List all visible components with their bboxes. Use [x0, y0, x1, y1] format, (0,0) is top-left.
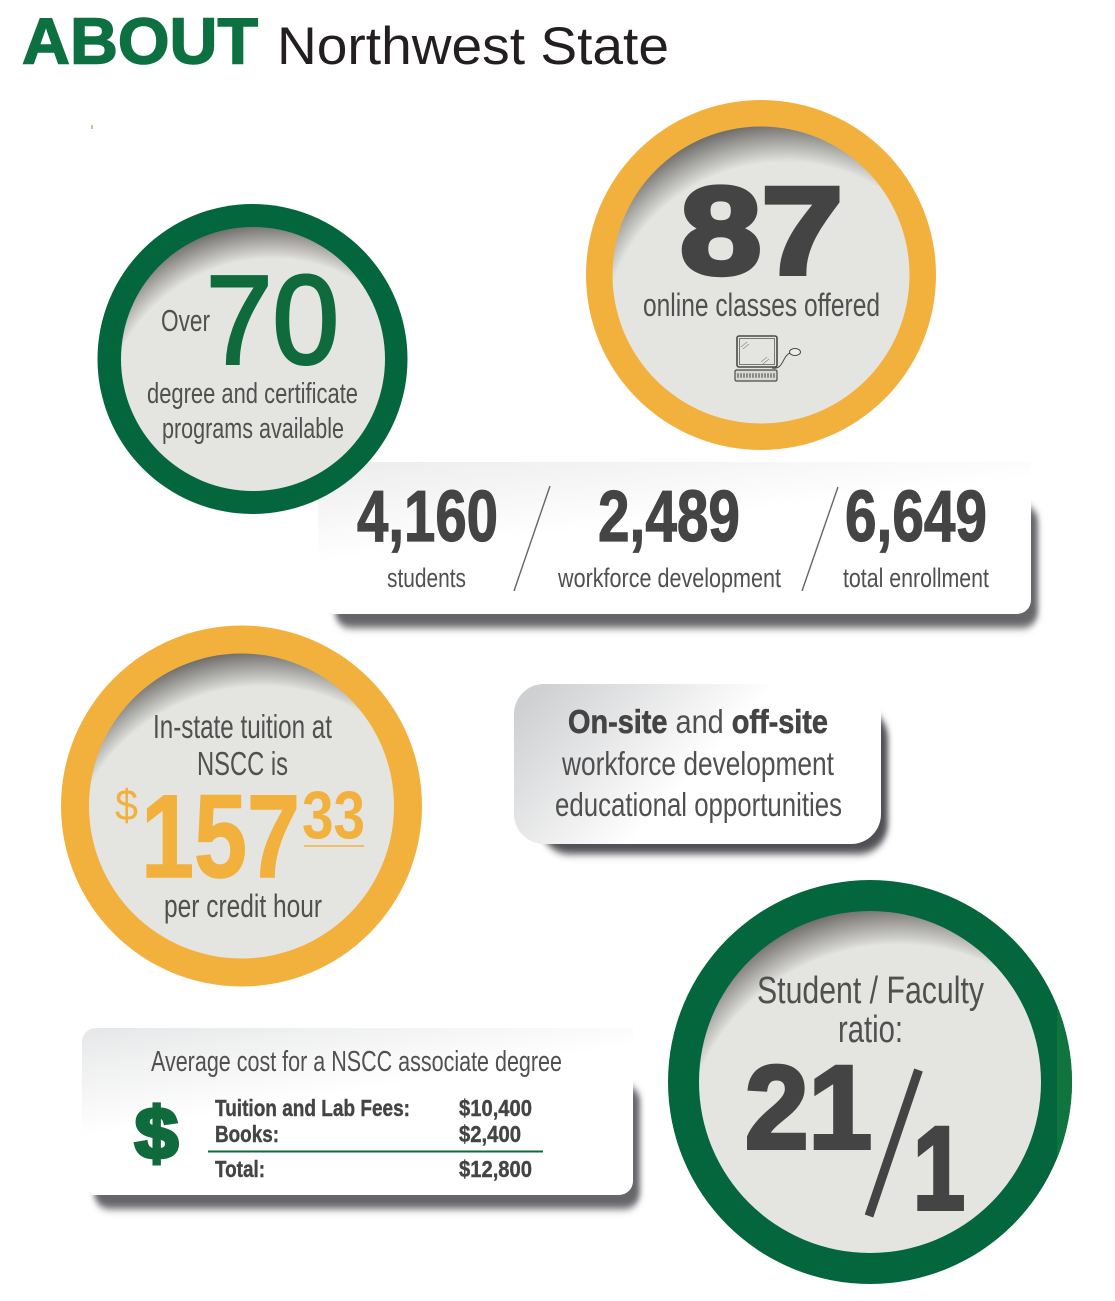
number 87: 87 — [680, 162, 843, 300]
panel: average degree cost — [82, 1028, 640, 1209]
inner disc — [121, 227, 385, 491]
label: Over: Over — [161, 303, 210, 338]
inner disc — [699, 911, 1041, 1253]
panel shadow — [540, 708, 888, 854]
panel: on-site and off-site — [514, 684, 888, 854]
caption top: In-state tuition at — [153, 708, 332, 745]
stat: students — [357, 477, 498, 593]
title words: Northwest State: Northwest State — [277, 17, 669, 76]
inner disc — [89, 654, 394, 958]
caption top: NSCC is — [197, 745, 288, 782]
price: 33 — [302, 777, 365, 853]
panel text — [555, 703, 842, 823]
panel text: educational opportunities — [555, 786, 842, 823]
stat: workforce development — [557, 477, 781, 593]
panel shadow — [335, 505, 1038, 628]
caption — [757, 970, 984, 1051]
circle: over 70 programs — [98, 204, 408, 514]
stat: students: students — [387, 563, 466, 593]
ratio figure — [745, 1042, 965, 1235]
cost table: Books: — [215, 1121, 279, 1147]
panel shadow — [94, 1085, 640, 1209]
icon: laptop computer — [735, 336, 800, 381]
price: 157 — [141, 771, 300, 903]
cost table — [208, 1095, 543, 1182]
divider slash one — [514, 486, 550, 591]
ratio figure: 1 — [913, 1103, 965, 1235]
price: $ — [115, 781, 138, 830]
panel: enrollment figures — [318, 462, 1038, 628]
caption: ratio: — [838, 1009, 903, 1051]
gold ring — [586, 100, 936, 450]
caption top — [153, 708, 332, 782]
caption — [147, 378, 358, 445]
title word: ABOUT: ABOUT — [22, 4, 258, 78]
panel text: On-site and off-site — [568, 703, 828, 740]
circle: tuition per credit hour — [61, 626, 422, 986]
stat: total enrollment: total enrollment — [843, 563, 989, 593]
gold ring — [61, 626, 422, 986]
stat: students: 4,160 — [357, 477, 498, 557]
cost table: $2,400 — [459, 1121, 521, 1147]
panel surface — [318, 462, 1031, 614]
cost table: Total: — [215, 1156, 265, 1182]
panel surface — [82, 1028, 633, 1195]
caption: degree and certificate — [147, 378, 358, 410]
panel heading: Average cost for a NSCC associate degree — [151, 1046, 562, 1078]
icon: dollar sign: $ — [135, 1094, 178, 1174]
stat: workforce development: 2,489 — [598, 477, 740, 557]
panel surface — [514, 684, 881, 844]
green ring — [98, 204, 408, 514]
cost table: $12,800 — [459, 1156, 532, 1182]
cost table: $10,400 — [459, 1095, 532, 1121]
inner disc — [612, 126, 910, 424]
stat: workforce development: workforce development — [557, 563, 781, 593]
caption: programs available — [162, 413, 344, 445]
circle: student faculty ratio — [668, 880, 1073, 1284]
number 70: 70 — [206, 250, 339, 390]
stat: total enrollment: 6,649 — [845, 477, 987, 557]
caption: Student / Faculty — [757, 970, 984, 1012]
title — [22, 4, 669, 78]
stat: total enrollment — [843, 477, 989, 593]
cost table: Tuition and Lab Fees: — [215, 1095, 410, 1121]
green ring — [668, 880, 1072, 1284]
caption bottom: per credit hour — [164, 888, 322, 924]
divider slash two — [802, 487, 838, 591]
ratio figure: 21 — [745, 1042, 872, 1174]
panel text: workforce development — [561, 745, 834, 782]
caption: online classes offered — [643, 287, 880, 323]
circle: 87 online classes — [586, 100, 936, 450]
